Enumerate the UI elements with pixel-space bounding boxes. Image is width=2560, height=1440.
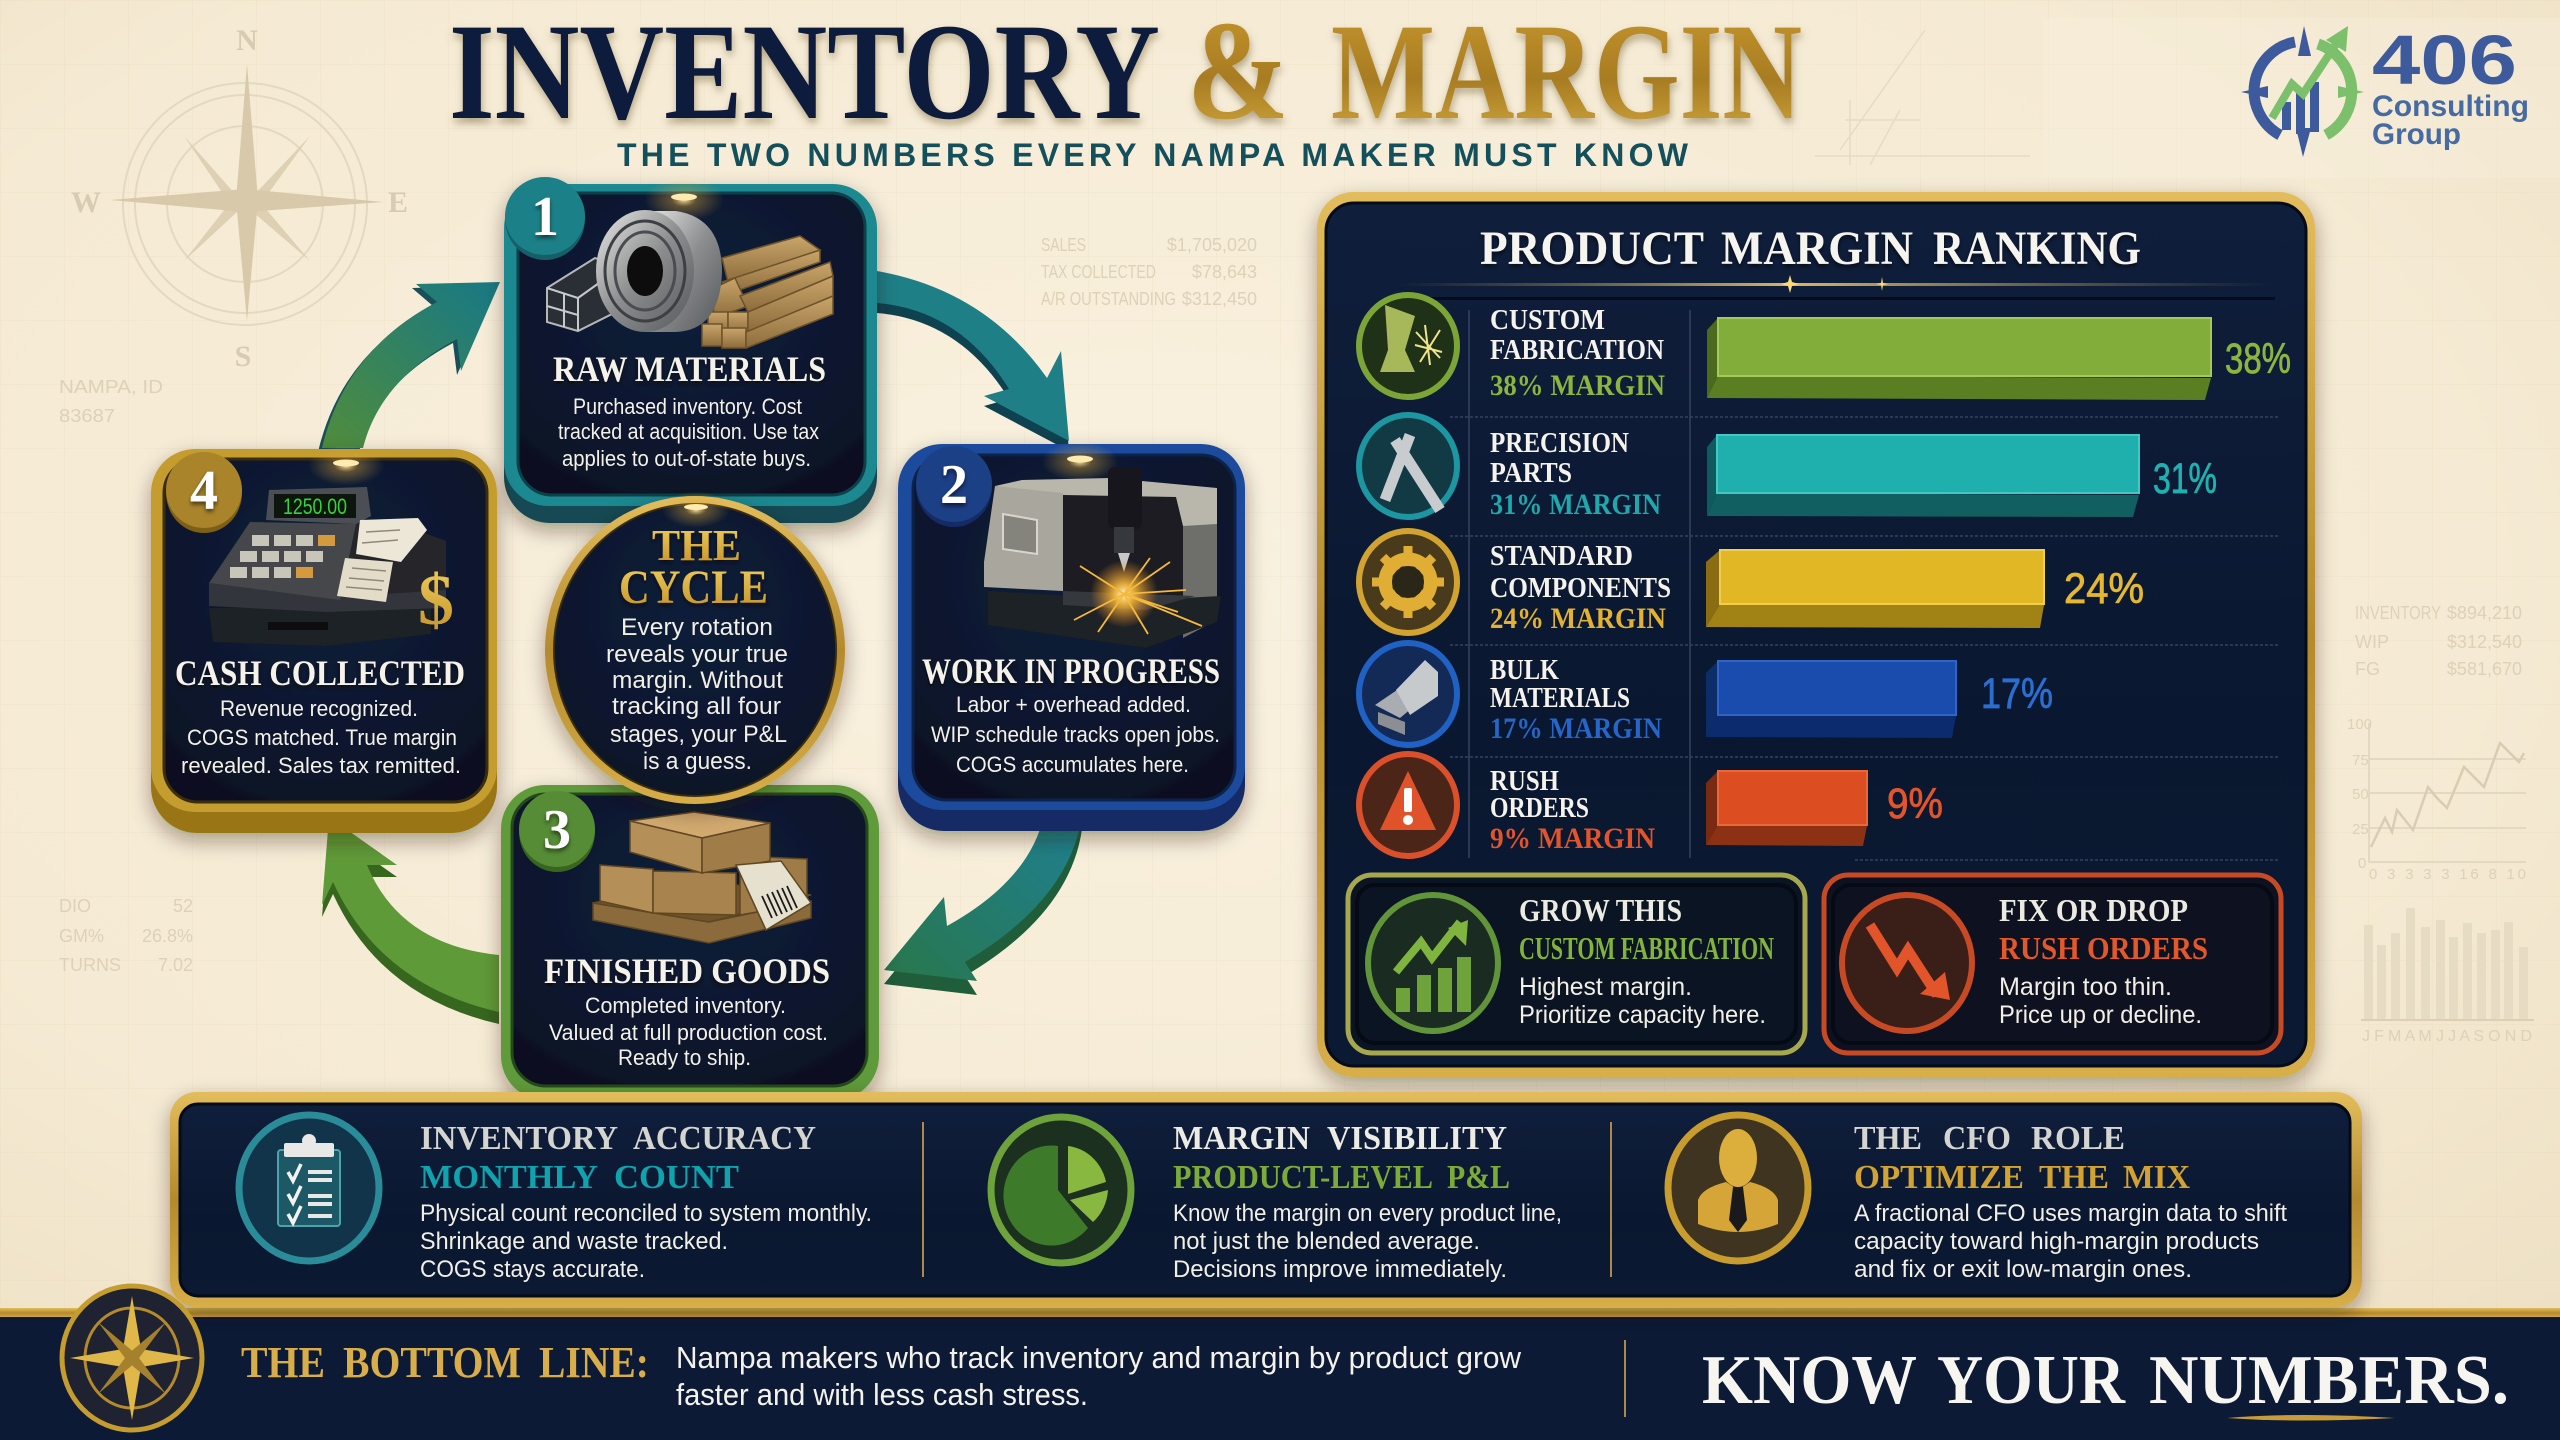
text block: VISIBILITY xyxy=(1327,1120,1507,1157)
faint ledger right: FG xyxy=(2355,659,2380,679)
text block: Highest margin. xyxy=(1519,973,1692,1001)
text block: WIP schedule tracks open jobs. xyxy=(931,722,1220,747)
arrow: cash collected to raw materials xyxy=(318,282,500,452)
badge: 1 xyxy=(505,177,585,260)
panel: work in progress xyxy=(898,442,1245,831)
heading: PRODUCT xyxy=(1480,222,1704,275)
text block: COGS matched. True margin xyxy=(187,725,457,750)
text block: tracked at acquisition. Use tax xyxy=(558,419,819,444)
text block: 31% MARGIN xyxy=(1490,488,1661,521)
bar: 38% xyxy=(1707,318,2211,400)
faint ledger left: 52 xyxy=(173,896,193,916)
text block: Decisions improve immediately. xyxy=(1173,1256,1507,1283)
row: rush orders xyxy=(1359,754,1943,856)
icon: metal ingots xyxy=(1359,643,1457,745)
value: 9% xyxy=(1887,780,1943,828)
text block: COUNT xyxy=(614,1159,739,1196)
bottom line message xyxy=(241,1338,1522,1412)
faint ledger top xyxy=(1041,235,1257,309)
faint ledger right xyxy=(2355,603,2522,679)
icon: cash register: $ xyxy=(418,560,454,640)
bar: 17% xyxy=(1706,661,1956,738)
text block: and fix or exit low-margin ones. xyxy=(1854,1256,2192,1283)
text block: Prioritize capacity here. xyxy=(1519,1001,1766,1029)
icon: cash register xyxy=(209,487,454,646)
faint ledger left: DIO xyxy=(59,896,91,916)
bar: 24% xyxy=(1706,550,2044,628)
faint location note: 83687 xyxy=(59,406,115,426)
icon: boxes on pallet xyxy=(593,812,811,943)
faint ledger left: 26.8% xyxy=(142,926,193,946)
text block: INVENTORY xyxy=(420,1120,618,1157)
faint bar chart: J F M A M J J A S O N D xyxy=(2362,1028,2532,1045)
text block: FABRICATION xyxy=(1490,335,1664,366)
heading: CYCLE xyxy=(619,561,768,614)
faint ledger left: TURNS xyxy=(59,955,121,975)
badge: 3: 3 xyxy=(543,799,571,861)
logo: 406 Consulting Group: Group xyxy=(2372,118,2461,151)
text block: revealed. Sales tax remitted. xyxy=(181,753,461,778)
text block: ORDERS xyxy=(1490,793,1589,824)
heading xyxy=(619,521,768,614)
value: 17% xyxy=(1981,670,2053,718)
call to action: NUMBERS. xyxy=(2149,1342,2509,1419)
badge: 4: 4 xyxy=(190,460,218,522)
text block: COGS accumulates here. xyxy=(956,752,1189,777)
value: 31% xyxy=(2153,455,2217,503)
value: 24% xyxy=(2064,565,2144,613)
text block: Margin too thin. xyxy=(1999,973,2172,1001)
text block: tracking all four xyxy=(612,693,781,720)
faint compass rose xyxy=(71,24,408,373)
text block: ROLE xyxy=(2031,1120,2125,1157)
faint ledger top: TAX COLLECTED xyxy=(1041,262,1156,282)
bar: 9% xyxy=(1706,771,1867,846)
panel: the cycle center xyxy=(545,492,845,804)
icon: gold compass medallion xyxy=(62,1286,202,1430)
faint ledger right: $581,670 xyxy=(2447,659,2522,679)
text block: Shrinkage and waste tracked. xyxy=(420,1228,728,1255)
text block: P&L xyxy=(1447,1159,1510,1196)
heading: CASH COLLECTED xyxy=(175,653,465,693)
logo: 406 Consulting Group: 406 xyxy=(2372,21,2517,99)
icon: welding arm xyxy=(1359,295,1457,397)
text block xyxy=(931,692,1220,777)
badge: 3 xyxy=(519,791,595,872)
faint ledger left xyxy=(59,896,193,975)
bottom line message: faster and with less cash stress. xyxy=(676,1377,1088,1412)
text block xyxy=(549,993,828,1070)
heading xyxy=(1480,222,2141,275)
logo: 406 Consulting Group: Consulting xyxy=(2372,90,2529,123)
panel: product margin ranking xyxy=(1317,192,2315,1077)
panel: cash collected xyxy=(151,446,497,833)
icon: warning triangle xyxy=(1359,754,1457,856)
row: precision parts xyxy=(1359,415,2217,521)
text block xyxy=(1490,428,1661,521)
text block: capacity toward high-margin products xyxy=(1854,1228,2259,1255)
text block: Price up or decline. xyxy=(1999,1001,2202,1029)
text block: Completed inventory. xyxy=(585,993,786,1018)
text block: MONTHLY xyxy=(420,1159,598,1196)
text block: COGS stays accurate. xyxy=(420,1256,645,1283)
arrow: finished goods to cash collected xyxy=(322,817,499,1024)
row: bulk materials xyxy=(1359,643,2053,745)
text block xyxy=(1999,892,2208,1029)
icon: cash register: 1250.00 xyxy=(283,494,347,519)
icon: steel coil and lumber xyxy=(547,210,833,348)
text block: PARTS xyxy=(1490,458,1572,489)
faint line chart: 25 xyxy=(2352,821,2369,838)
text block: FIX OR DROP xyxy=(1999,892,2188,928)
bar: 31% xyxy=(1707,435,2139,517)
text block: Ready to ship. xyxy=(618,1045,751,1070)
faint sketch top right xyxy=(1815,30,2030,165)
text block xyxy=(558,394,819,471)
icon: pie chart xyxy=(991,1117,1131,1263)
text block: Revenue recognized. xyxy=(220,696,418,721)
text block: RUSH ORDERS xyxy=(1999,930,2208,966)
faint ledger top: $1,705,020 xyxy=(1167,235,1257,255)
text block: BULK xyxy=(1490,655,1559,686)
arrow: raw materials to work in progress xyxy=(877,271,1069,451)
value: 38% xyxy=(2225,335,2291,383)
text block: Labor + overhead added. xyxy=(956,692,1191,717)
panel: three pillars xyxy=(170,1092,2362,1307)
icon: advisor xyxy=(1668,1115,1808,1261)
faint ledger right: INVENTORY xyxy=(2355,603,2441,623)
faint line chart: 50 xyxy=(2352,786,2369,803)
panel: finished goods xyxy=(501,785,879,1100)
text block: Know the margin on every product line, xyxy=(1173,1200,1562,1227)
faint line chart xyxy=(2347,716,2526,883)
pillar: inventory accuracy xyxy=(239,1115,872,1283)
pillar: margin visibility xyxy=(991,1117,1562,1283)
faint ledger top: $312,450 xyxy=(1182,289,1257,309)
faint ledger left: GM% xyxy=(59,926,104,946)
text block: is a guess. xyxy=(643,748,752,775)
logo: 406 Consulting Group xyxy=(2241,21,2529,157)
text block: OPTIMIZE xyxy=(1854,1159,2024,1196)
text block: Physical count reconciled to system monthly. xyxy=(420,1200,872,1227)
badge: 2: 2 xyxy=(940,454,968,516)
heading: MARGIN xyxy=(1721,222,1913,275)
text block: reveals your true xyxy=(606,641,788,668)
text block: CFO xyxy=(1943,1120,2011,1157)
call to action: KNOW xyxy=(1702,1342,1917,1419)
call to action xyxy=(1624,1340,2509,1420)
faint location note xyxy=(59,377,163,426)
text block: CUSTOM xyxy=(1490,305,1605,336)
icon: falling arrow xyxy=(1842,895,1972,1031)
text block xyxy=(1854,1120,2287,1283)
text block: CUSTOM FABRICATION xyxy=(1519,930,1774,966)
text block: Every rotation xyxy=(621,614,773,641)
text block xyxy=(181,696,461,778)
text block: 9% MARGIN xyxy=(1490,822,1655,855)
faint line chart: 100 xyxy=(2347,716,2372,733)
faint bar chart xyxy=(2361,908,2534,1045)
badge: 1: 1 xyxy=(531,186,559,248)
text block xyxy=(1490,305,1665,402)
faint location note: NAMPA, ID xyxy=(59,377,163,397)
icon: growth chart xyxy=(1368,895,1498,1031)
faint compass rose: W xyxy=(71,186,101,219)
heading: FINISHED GOODS xyxy=(544,951,830,991)
bottom line message: LINE: xyxy=(539,1338,649,1387)
text block: MATERIALS xyxy=(1490,683,1630,714)
text block xyxy=(420,1120,872,1283)
row: custom fabrication xyxy=(1359,295,2291,402)
callout: fix or drop xyxy=(1824,875,2281,1053)
faint ledger right: $894,210 xyxy=(2447,603,2522,623)
faint ledger right: $312,540 xyxy=(2447,632,2522,652)
faint compass rose: N xyxy=(236,24,258,57)
text block: THE xyxy=(2039,1159,2109,1196)
text block: applies to out-of-state buys. xyxy=(562,446,811,471)
text block: 24% MARGIN xyxy=(1490,602,1666,635)
faint compass rose: S xyxy=(235,340,251,373)
subtitle: THE TWO NUMBERS EVERY NAMPA MAKER MUST KNOW xyxy=(617,137,1689,173)
heading: RAW MATERIALS xyxy=(553,349,826,389)
text block: RUSH xyxy=(1490,766,1559,797)
text block: GROW THIS xyxy=(1519,892,1682,928)
faint compass rose: E xyxy=(388,186,408,219)
text block: margin. Without xyxy=(612,667,783,694)
faint ledger right: WIP xyxy=(2355,632,2389,652)
bottom line message: BOTTOM xyxy=(343,1338,521,1387)
faint ledger top: $78,643 xyxy=(1192,262,1257,282)
text block: ACCURACY xyxy=(633,1120,816,1157)
badge: 4 xyxy=(166,452,242,533)
text block: Purchased inventory. Cost xyxy=(573,394,802,419)
text block xyxy=(1519,892,1774,1029)
badge: 2 xyxy=(916,446,992,527)
bottom line message: Nampa makers who track inventory and margin by product grow xyxy=(676,1340,1522,1375)
faint ledger top: SALES xyxy=(1041,235,1086,255)
faint ledger top: A/R OUTSTANDING xyxy=(1041,289,1176,309)
heading: WORK IN PROGRESS xyxy=(922,651,1220,691)
icon: clipboard xyxy=(239,1115,379,1261)
icon: gear xyxy=(1359,531,1457,633)
heading: RANKING xyxy=(1933,222,2141,275)
text block xyxy=(1490,541,1671,635)
icon: caliper and wrench xyxy=(1359,415,1457,517)
text block: COMPONENTS xyxy=(1490,573,1671,604)
text block: THE xyxy=(1854,1120,1922,1157)
faint line chart: 0 3 3 3 3 16 8 10 xyxy=(2369,866,2526,883)
arrow: work in progress to finished goods xyxy=(884,815,1082,995)
text block: PRODUCT-LEVEL xyxy=(1173,1159,1433,1196)
text block: not just the blended average. xyxy=(1173,1228,1480,1255)
text block: STANDARD xyxy=(1490,541,1633,572)
call to action: YOUR xyxy=(1937,1342,2126,1419)
bottom band xyxy=(0,1308,2560,1440)
pillar: the CFO role xyxy=(1668,1115,2287,1283)
text block xyxy=(1173,1120,1562,1283)
text block: stages, your P&L xyxy=(610,721,787,748)
text block: 17% MARGIN xyxy=(1490,712,1662,745)
faint line chart: 75 xyxy=(2352,752,2369,769)
callout: grow this xyxy=(1348,875,1805,1053)
text block xyxy=(606,614,788,775)
icon: CNC machine xyxy=(984,467,1221,648)
text block: A fractional CFO uses margin data to shift xyxy=(1854,1200,2287,1227)
text block: PRECISION xyxy=(1490,428,1629,459)
text block: 38% MARGIN xyxy=(1490,369,1665,402)
title xyxy=(449,0,1802,149)
text block: MIX xyxy=(2123,1159,2190,1196)
faint ledger left: 7.02 xyxy=(158,955,193,975)
faint line chart: 0 xyxy=(2358,855,2366,872)
text block: Valued at full production cost. xyxy=(549,1020,828,1045)
panel: raw materials xyxy=(504,177,877,523)
bottom line message: THE xyxy=(241,1338,325,1387)
text block xyxy=(1490,766,1655,855)
row: standard components xyxy=(1359,531,2144,635)
text block: MARGIN xyxy=(1173,1120,1310,1157)
heading: THE xyxy=(652,521,741,570)
text block xyxy=(1490,655,1662,745)
